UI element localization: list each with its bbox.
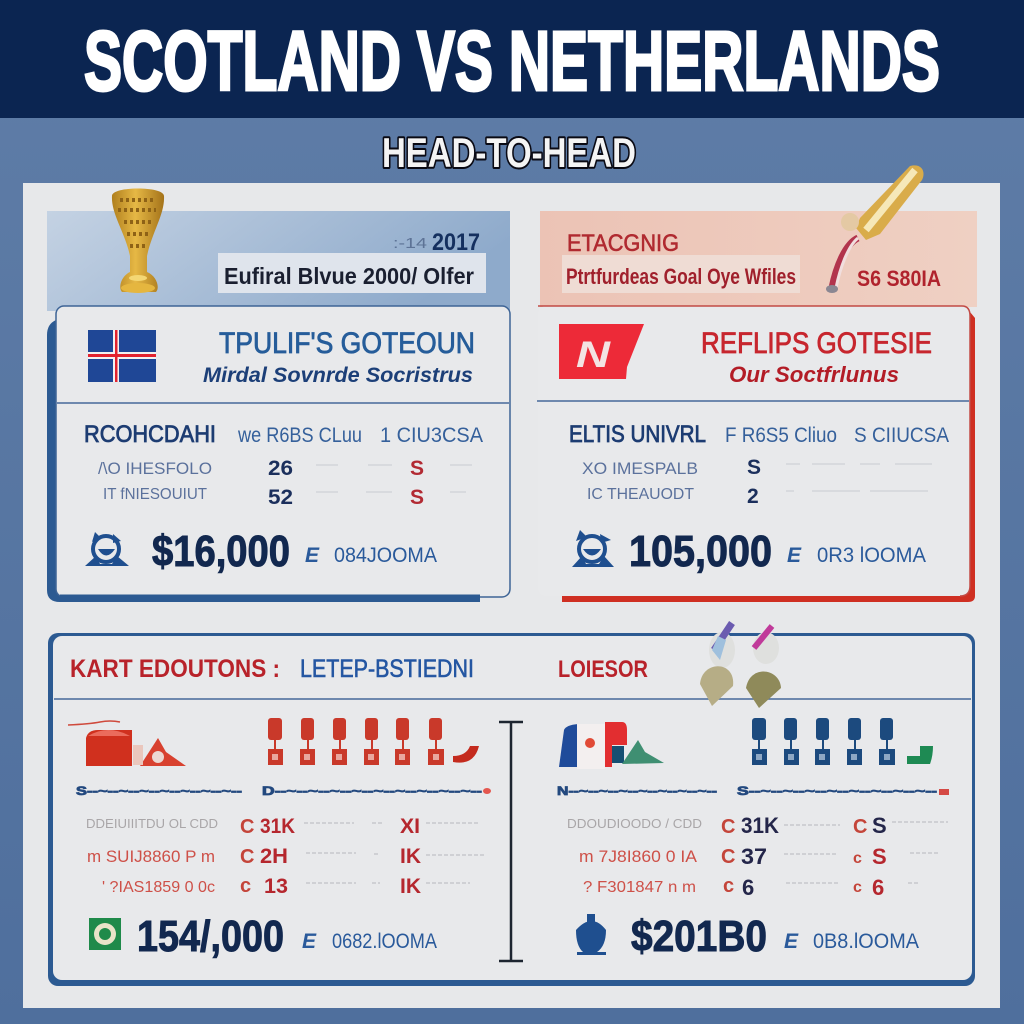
Scotland attendance figure [152,527,437,576]
comparison heading: LOIESOR [558,656,648,683]
Scotland header band [47,211,510,311]
Scotland attendance rows: C [240,816,254,838]
Scotland total figure: 154/,000 [137,912,284,961]
Netherlands attendance rows: c [723,875,734,897]
Netherlands attendance rows: m 7J8I860 0 IA [579,847,698,866]
Netherlands stats table: XO IMESPALB [582,459,698,478]
Netherlands card heading: Our Soctfrlunus [729,362,899,387]
icon: Scotland team bag [68,721,186,766]
Scotland card heading [203,327,475,387]
Scotland stats table: 26 [268,457,293,480]
Netherlands header band [540,211,977,307]
Scotland attendance figure: 084JOOMA [334,544,437,567]
Netherlands stats table: ELTIS UNIVRL [569,421,706,448]
Scotland attendance rows: m SUIJ8860 P m [87,847,215,866]
Scotland stats table: RCOHCDAHI [84,421,216,448]
Netherlands attendance figure: E [787,544,802,567]
Netherlands dotted caption: S‑‑~‑‑~‑‑~‑‑~‑‑~‑‑~‑‑~‑‑~‑‑ [737,784,937,798]
icon: Netherlands flag: N [576,334,612,375]
Scotland card [47,306,510,602]
main white panel [23,183,1000,1008]
Scotland attendance rows: 13 [264,875,288,898]
Netherlands attendance rows: C [721,846,735,868]
Scotland total figure: 0682.lOOMA [332,930,437,953]
Netherlands card heading [701,327,932,387]
icon: tricolour flag [559,722,664,769]
icon: kit figures [700,623,781,708]
icon: Scotland crest [85,532,129,566]
Scotland stats table: 1 CIU3CSA [380,424,483,447]
Netherlands stats table: 2 [747,485,759,508]
Scotland stats table: we R6BS CLuu [237,424,362,447]
icon: crown trophy [576,914,606,955]
icon: gold trophy [112,188,164,293]
icon: Netherlands crest [572,530,614,567]
comparison heading: LETEP-BSTIEDNI [300,655,474,683]
Netherlands stats table: IC THEAUODT [587,486,694,503]
Scotland card heading: TPULIF'S GOTEOUN [219,327,475,360]
Netherlands attendance rows: 31K [741,813,779,838]
Scotland dotted caption [76,784,491,798]
Scotland total figure: E [302,930,317,953]
comparison card [48,633,975,986]
subtitle: HEAD-TO-HEAD [382,129,636,176]
Scotland attendance rows: 31K [260,815,295,838]
Scotland stats table: /\O IHESFOLO [98,459,212,478]
Netherlands attendance figure [629,527,926,576]
Netherlands stats table: S CIIUCSA [854,424,949,447]
Netherlands header note [562,230,941,293]
Scotland dotted caption: D‑‑~‑‑~‑‑~‑‑~‑‑~‑‑~‑‑~‑‑~‑‑~‑‑ [262,784,482,798]
Netherlands attendance rows: 37 [741,844,767,869]
panel: key editions comparison [48,623,975,986]
panel: Netherlands column [537,165,977,602]
Netherlands attendance rows: DDOUDIOODO / CDD [567,816,702,831]
Scotland attendance rows [86,815,484,898]
Netherlands header note: ETACGNIG [567,230,679,257]
Scotland dotted caption: S‑‑~‑‑~‑‑~‑‑~‑‑~‑‑~‑‑~‑‑ [76,784,242,798]
Netherlands stats table [569,421,949,508]
Scotland total figure [137,912,437,961]
Scotland card heading: Mirdal Sovnrde Socristrus [203,364,473,387]
Netherlands header note: Ptrtfurdeas Goal Oye Wfiles [566,264,796,289]
Scotland header note: Eufiral Blvue 2000/ Olfer [224,263,474,289]
Netherlands attendance rows [567,813,948,900]
icon: gold cricket bat [826,165,924,293]
Scotland header note [218,253,486,293]
Scotland attendance rows: c [240,875,251,897]
Netherlands attendance rows: c [853,879,862,896]
Netherlands attendance rows: C [853,816,867,838]
icon: Netherlands flag [559,324,644,379]
Scotland stats table: 52 [268,486,293,509]
Scotland stats table: IT fNIESOUIUT [103,486,207,503]
divider [57,402,509,404]
Netherlands dotted caption: N‑‑~‑‑~‑‑~‑‑~‑‑~‑‑~‑‑~‑‑ [557,784,717,798]
Netherlands total figure [631,912,919,961]
Scotland attendance rows: IK [400,845,421,868]
Netherlands dotted caption [557,784,949,798]
Netherlands attendance figure: 105,000 [629,527,772,576]
icon: Netherlands player row [752,718,933,765]
Scotland header year [393,229,480,256]
Scotland attendance figure: $16,000 [152,527,290,576]
subtitle: HEAD-TO-HEAD [382,129,636,176]
Netherlands attendance rows: 6 [742,875,754,900]
Netherlands card [538,306,975,602]
Scotland attendance rows: C [240,846,254,868]
Netherlands attendance rows: S [872,844,887,869]
Scotland header year: 2017 [432,229,480,256]
Netherlands stats table: S [747,456,761,479]
Netherlands total figure: $201B0 [631,912,767,961]
vertical separator [499,722,523,961]
Scotland stats table [84,421,483,509]
Netherlands attendance rows: C [721,816,735,838]
Scotland header year: :-14 [393,235,427,252]
Scotland attendance figure: E [305,544,320,567]
Netherlands stats table: F R6S5 Cliuo [725,424,837,447]
Netherlands attendance rows: ? F301847 n m [583,879,696,896]
Scotland attendance rows: 2H [260,845,288,868]
Scotland attendance rows: XI [400,815,420,838]
Scotland attendance rows: ' ?IAS1859 0 0c [102,879,215,896]
Scotland stats table: S [410,457,424,480]
Netherlands attendance figure: 0R3 lOOMA [817,544,926,567]
Netherlands attendance rows: c [853,850,862,867]
Netherlands total figure: 0B8.lOOMA [813,930,919,953]
Netherlands attendance rows: S [872,813,887,838]
divider [54,698,971,700]
Netherlands header note: S6 S80IA [857,266,941,291]
Netherlands card heading: REFLIPS GOTESIE [701,327,932,360]
panel: Scotland column [47,188,510,602]
Scotland stats table: S [410,486,424,509]
comparison heading [70,655,648,683]
Netherlands attendance rows: 6 [872,875,884,900]
Netherlands total figure: E [784,930,799,953]
icon: Scotland player row [268,718,479,765]
icon: green badge [89,918,121,950]
divider [537,400,969,402]
Scotland attendance rows: IK [400,875,421,898]
comparison heading: KART EDOUTONS : [70,655,280,683]
Scotland attendance rows: DDEIUIIITDU OL CDD [86,816,218,831]
icon: Scotland flag [88,330,156,382]
